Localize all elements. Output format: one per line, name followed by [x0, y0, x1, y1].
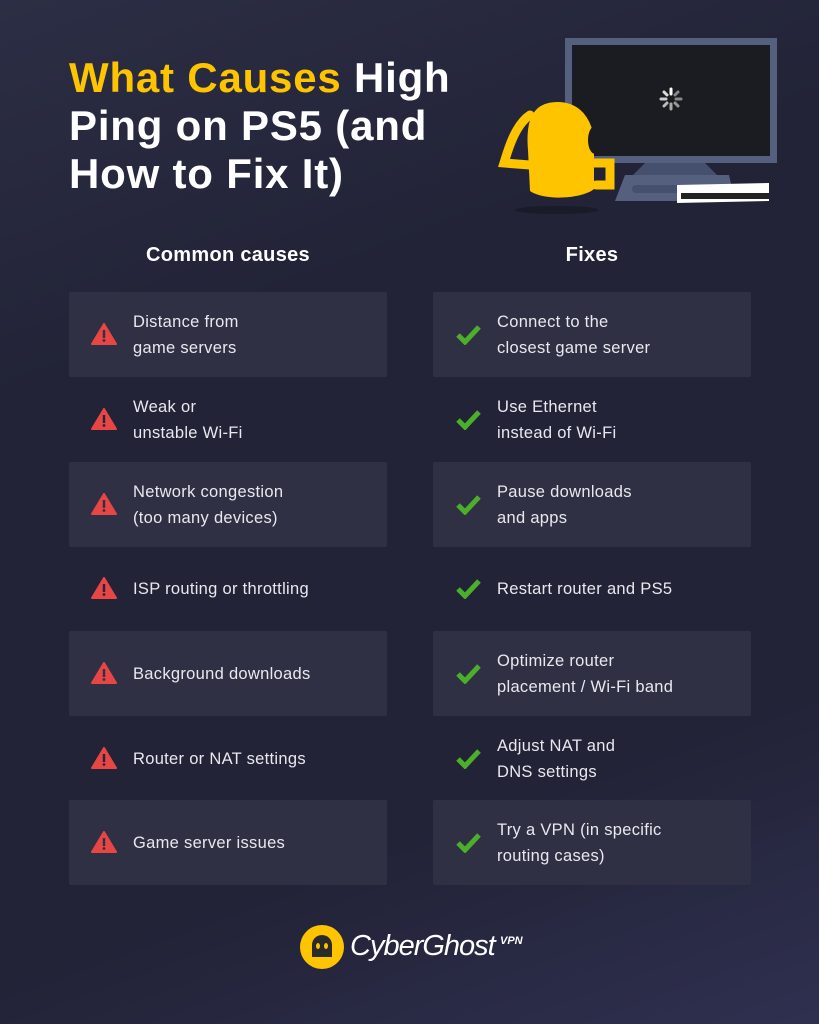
- cause 4: ISP routing or throttling: [133, 580, 309, 598]
- fix 1: closest game server: [497, 338, 650, 356]
- cause 3: [69, 462, 387, 547]
- cause 4: [91, 577, 309, 599]
- fix 6: Adjust NAT and: [497, 736, 615, 754]
- cause 2: Weak or: [133, 398, 196, 416]
- title: [69, 54, 451, 197]
- logo: CyberGhost VPN: CyberGhost: [350, 930, 495, 962]
- fix 5: [433, 631, 751, 716]
- cause 3: Network congestion: [133, 482, 283, 500]
- fix 2: Use Ethernet: [497, 398, 597, 416]
- fix 3: Pause downloads: [497, 482, 632, 500]
- cause 1: game servers: [133, 338, 237, 356]
- logo: CyberGhost VPN: [300, 925, 523, 969]
- cause 6: Router or NAT settings: [133, 750, 306, 768]
- fix 3: and apps: [497, 508, 567, 526]
- title: Ping on PS5 (and: [69, 102, 427, 149]
- cause 6: [91, 747, 306, 769]
- fix 3: [433, 462, 751, 547]
- cause 3: (too many devices): [133, 508, 278, 526]
- fix 5: Optimize router: [497, 652, 614, 670]
- cause 5: Background downloads: [133, 664, 311, 682]
- cause 5: [69, 631, 387, 716]
- cause 7: Game server issues: [133, 834, 285, 852]
- fix 1: Connect to the: [497, 312, 609, 330]
- fix 6: [456, 736, 615, 780]
- fix 7: routing cases): [497, 846, 605, 864]
- fix 1: [433, 292, 751, 377]
- fix 2: [456, 398, 616, 442]
- causes list: [69, 292, 387, 885]
- cause 2: unstable Wi-Fi: [133, 424, 243, 442]
- cause 2: [91, 398, 243, 442]
- heading: fixes: Fixes: [566, 244, 618, 266]
- fix 6: DNS settings: [497, 762, 597, 780]
- fix 2: instead of Wi-Fi: [497, 424, 616, 442]
- title: What Causes High: [69, 54, 451, 101]
- logo: CyberGhost VPN: VPN: [500, 935, 523, 947]
- fix 5: placement / Wi-Fi band: [497, 678, 673, 696]
- cause 1: Distance from: [133, 312, 239, 330]
- fix 7: [433, 800, 751, 885]
- cause 1: [69, 292, 387, 377]
- illustration: ghost and tv: [498, 38, 777, 214]
- fix 7: Try a VPN (in specific: [497, 820, 662, 838]
- fixes list: [433, 292, 751, 885]
- heading: common causes: Common causes: [146, 244, 310, 266]
- cause 7: [69, 800, 387, 885]
- title: How to Fix It): [69, 150, 344, 197]
- fix 4: Restart router and PS5: [497, 580, 672, 598]
